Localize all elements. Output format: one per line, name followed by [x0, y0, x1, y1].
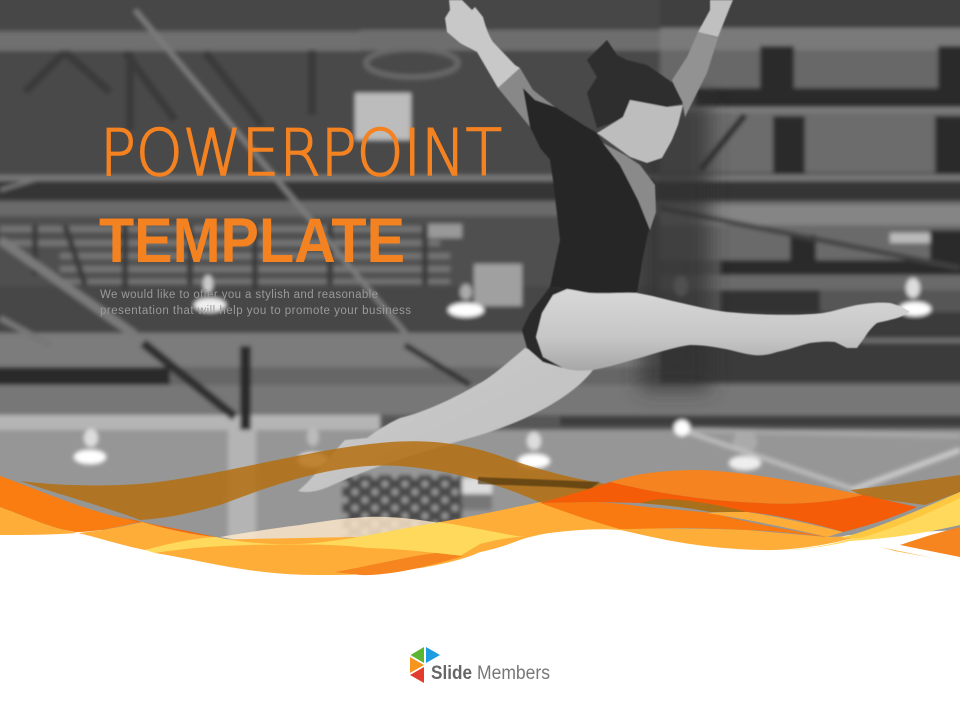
right yellow wave: [778, 492, 960, 551]
brown translucent ribbon right: [850, 475, 960, 505]
brown translucent ribbon left: [20, 441, 625, 520]
lamps: [74, 450, 106, 464]
left sleeve: [498, 68, 585, 160]
dark blurred structure behind gymnast: [640, 100, 710, 390]
right orange wedge: [900, 527, 960, 557]
pale translucent ribbon: [220, 517, 440, 545]
wave ribbons: [0, 441, 960, 575]
deep orange lower wave: [335, 553, 463, 575]
rails: [682, 430, 960, 436]
orange left wave: [0, 476, 140, 532]
pale ribbon right: [935, 494, 960, 513]
deep orange centre: [540, 482, 917, 532]
title: TEMPLATE: TEMPLATE: [99, 206, 405, 276]
rear leg: [298, 348, 593, 492]
left arm and hand: [445, 0, 520, 88]
gymnast figure: [298, 0, 910, 492]
leotard chest panel: [603, 143, 656, 230]
vivid orange band: [540, 502, 827, 537]
white footer: [0, 527, 960, 720]
light orange right band: [480, 528, 860, 552]
light orange band: [78, 522, 216, 550]
light orange wedge centre: [440, 502, 620, 537]
dark columns: [760, 46, 794, 88]
logo wordmark: [431, 663, 550, 684]
logo wordmark: Members: [477, 663, 550, 684]
leotard torso: [523, 88, 656, 293]
right yellow highlight: [840, 492, 960, 538]
subtitle text: We would like to offer you a stylish and reasonable: [100, 289, 378, 301]
light streak: [707, 512, 843, 537]
subtitle text: [100, 289, 411, 317]
front leg: [536, 289, 910, 371]
logo: Slide Members: [410, 647, 550, 684]
right sleeve: [672, 32, 718, 117]
head and neck: [597, 100, 683, 163]
leotard hip: [522, 287, 567, 368]
title: POWERPOINT: POWERPOINT: [100, 117, 502, 191]
logo icon: [410, 647, 440, 683]
flag: [342, 475, 462, 545]
dark band seen through ribbon: [478, 477, 600, 489]
hair: [587, 40, 683, 128]
right arm: [698, 0, 733, 37]
yellow wave: [145, 522, 522, 556]
thin orange line: [880, 547, 933, 558]
light orange main wave: [155, 535, 522, 575]
light orange left corner: [0, 507, 78, 535]
logo wordmark: Slide: [431, 663, 472, 684]
thin orange strip: [115, 515, 216, 540]
brown gap in centre: [640, 499, 747, 512]
subtitle text: presentation that will help you to promote your business: [100, 305, 411, 317]
rafters left: [25, 50, 312, 130]
orange crest: [610, 470, 863, 504]
